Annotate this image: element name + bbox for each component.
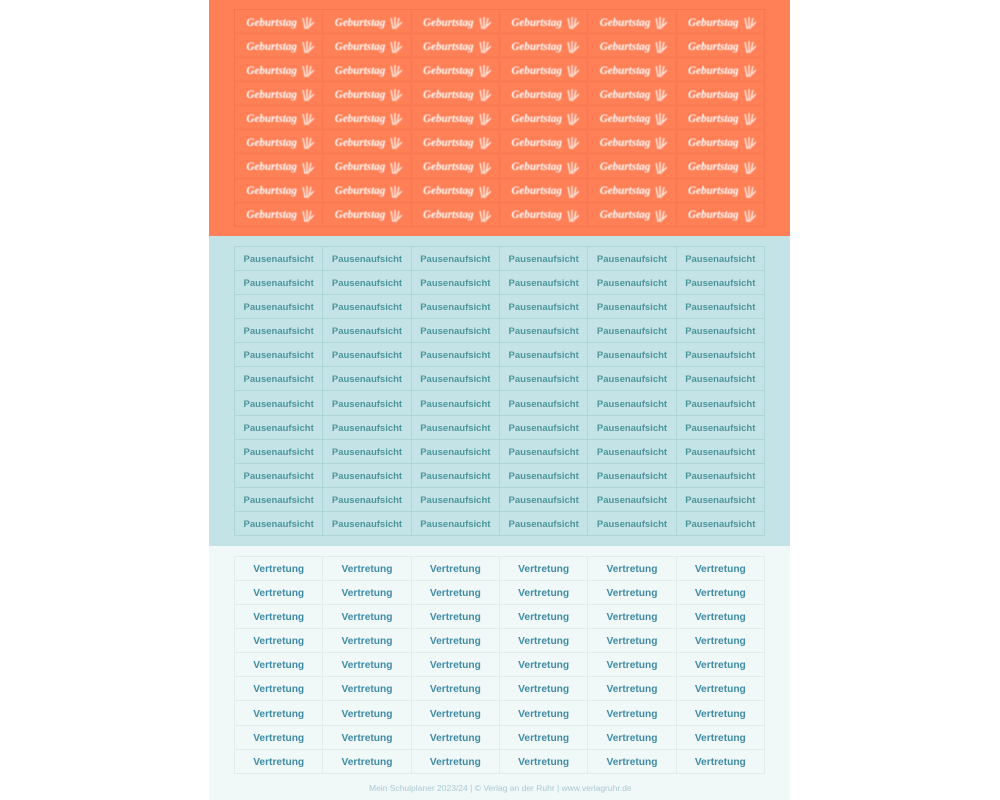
- sticker grid: Geburtstag: Geburtstag: [246, 185, 297, 197]
- sticker grid: Vertretung: Vertretung: [430, 757, 481, 768]
- sticker grid: Pausenaufsicht: Pausenaufsicht: [244, 350, 314, 361]
- sticker grid: Pausenaufsicht: Pausenaufsicht: [509, 302, 579, 313]
- sticker grid: Pausenaufsicht: Pausenaufsicht: [332, 278, 402, 289]
- sticker grid: Pausenaufsicht: Pausenaufsicht: [597, 278, 667, 289]
- sticker grid: Pausenaufsicht: Pausenaufsicht: [420, 423, 490, 434]
- sticker grid: Geburtstag: Geburtstag: [335, 17, 385, 29]
- sticker grid: Geburtstag: Geburtstag: [423, 161, 474, 173]
- sticker grid: Pausenaufsicht: Pausenaufsicht: [420, 471, 490, 482]
- sticker grid: Geburtstag: Geburtstag: [423, 209, 474, 221]
- sticker grid: Vertretung: Vertretung: [430, 588, 481, 599]
- sticker grid: Pausenaufsicht: Pausenaufsicht: [244, 254, 314, 265]
- sticker grid: Vertretung: Vertretung: [430, 708, 481, 720]
- sticker grid: Pausenaufsicht: Pausenaufsicht: [685, 495, 755, 506]
- sticker grid: Pausenaufsicht: Pausenaufsicht: [244, 398, 314, 410]
- sticker grid: Pausenaufsicht: Pausenaufsicht: [597, 471, 667, 482]
- sticker grid: Geburtstag: Geburtstag: [600, 41, 650, 53]
- sticker grid: Vertretung: Vertretung: [430, 684, 481, 695]
- sticker grid: Pausenaufsicht: Pausenaufsicht: [685, 254, 755, 265]
- sticker grid: Pausenaufsicht: Pausenaufsicht: [244, 471, 314, 482]
- sticker grid: Vertretung: Vertretung: [695, 588, 746, 599]
- sticker grid: Vertretung: Vertretung: [253, 612, 304, 623]
- sticker grid: Pausenaufsicht: Pausenaufsicht: [685, 302, 755, 313]
- sticker grid: Vertretung: Vertretung: [518, 757, 569, 768]
- sticker grid: Vertretung: Vertretung: [606, 733, 657, 744]
- sticker grid: Pausenaufsicht: Pausenaufsicht: [420, 254, 490, 265]
- sticker grid: Vertretung: Vertretung: [606, 684, 657, 695]
- sticker grid: Geburtstag: Geburtstag: [246, 41, 297, 53]
- sticker grid: Vertretung: Vertretung: [342, 636, 392, 647]
- sticker grid: Vertretung: Vertretung: [606, 757, 657, 768]
- sticker grid: Vertretung: Vertretung: [695, 636, 746, 647]
- sticker grid: Geburtstag: Geburtstag: [511, 185, 562, 197]
- sticker grid: Pausenaufsicht: Pausenaufsicht: [509, 350, 579, 361]
- sticker grid: Vertretung: Vertretung: [606, 588, 657, 599]
- panel: pale background: [209, 546, 790, 800]
- sticker grid: Vertretung: Vertretung: [518, 733, 569, 744]
- sticker grid: Geburtstag: Geburtstag: [335, 161, 385, 173]
- sticker grid: Pausenaufsicht: Pausenaufsicht: [420, 374, 490, 385]
- sticker grid: Geburtstag: Geburtstag: [688, 161, 739, 173]
- sticker grid: Geburtstag: Geburtstag: [600, 161, 650, 173]
- sticker grid: Vertretung: Vertretung: [253, 564, 304, 575]
- sticker grid: Vertretung: Vertretung: [253, 708, 304, 720]
- sticker grid: Vertretung: Vertretung: [342, 660, 392, 671]
- sticker grid: Vertretung: [234, 556, 765, 774]
- sticker grid: Pausenaufsicht: [234, 246, 765, 536]
- sticker grid: Pausenaufsicht: Pausenaufsicht: [244, 423, 314, 434]
- sticker grid: Pausenaufsicht: Pausenaufsicht: [509, 326, 579, 337]
- sticker grid: Pausenaufsicht: Pausenaufsicht: [597, 326, 667, 337]
- sticker grid: Geburtstag: Geburtstag: [600, 209, 650, 221]
- sticker grid: Pausenaufsicht: Pausenaufsicht: [597, 495, 667, 506]
- sticker grid: Vertretung: Vertretung: [342, 612, 392, 623]
- sticker grid: Vertretung: Vertretung: [342, 708, 392, 720]
- sticker grid: Pausenaufsicht: Pausenaufsicht: [597, 423, 667, 434]
- sticker grid: Geburtstag: Geburtstag: [246, 161, 297, 173]
- sticker grid: Pausenaufsicht: Pausenaufsicht: [332, 495, 402, 506]
- sticker grid: Pausenaufsicht: Pausenaufsicht: [244, 519, 314, 530]
- sticker grid: Pausenaufsicht: Pausenaufsicht: [420, 350, 490, 361]
- sticker grid: Vertretung: Vertretung: [253, 733, 304, 744]
- sticker grid: Pausenaufsicht: Pausenaufsicht: [509, 374, 579, 385]
- sticker grid: Pausenaufsicht: Pausenaufsicht: [244, 374, 314, 385]
- sticker grid: Vertretung: Vertretung: [430, 636, 481, 647]
- sticker grid: Vertretung: Vertretung: [606, 660, 657, 671]
- sticker grid: Vertretung: Vertretung: [518, 708, 569, 720]
- sticker grid: Vertretung: Vertretung: [518, 612, 569, 623]
- sticker grid: Geburtstag: Geburtstag: [688, 209, 739, 221]
- sticker grid: Pausenaufsicht: Pausenaufsicht: [332, 302, 402, 313]
- sticker grid: Pausenaufsicht: Pausenaufsicht: [244, 326, 314, 337]
- sticker grid: Pausenaufsicht: Pausenaufsicht: [332, 254, 402, 265]
- sticker grid: Vertretung: Vertretung: [695, 757, 746, 768]
- sticker grid: Pausenaufsicht: Pausenaufsicht: [332, 326, 402, 337]
- sticker grid: Geburtstag: Geburtstag: [423, 65, 474, 77]
- sticker grid: Pausenaufsicht: Pausenaufsicht: [685, 471, 755, 482]
- sticker grid: Pausenaufsicht: Pausenaufsicht: [685, 374, 755, 385]
- sticker grid: Pausenaufsicht: Pausenaufsicht: [685, 398, 755, 410]
- sticker grid: Vertretung: Vertretung: [342, 588, 392, 599]
- sticker grid: Vertretung: Vertretung: [342, 733, 392, 744]
- sticker grid: Vertretung: Vertretung: [342, 757, 392, 768]
- sticker grid: Geburtstag: Geburtstag: [688, 113, 739, 125]
- sticker grid: Geburtstag: Geburtstag: [511, 113, 562, 125]
- sticker grid: Geburtstag: Geburtstag: [246, 17, 297, 29]
- sticker grid: Geburtstag: Geburtstag: [335, 89, 385, 101]
- sticker grid: Geburtstag: Geburtstag: [423, 185, 474, 197]
- sticker grid: Vertretung: Vertretung: [518, 588, 569, 599]
- sticker grid: Pausenaufsicht: Pausenaufsicht: [332, 447, 402, 458]
- sticker grid: Geburtstag: Geburtstag: [600, 137, 650, 149]
- sticker grid: Pausenaufsicht: Pausenaufsicht: [420, 278, 490, 289]
- sticker grid: Pausenaufsicht: Pausenaufsicht: [685, 278, 755, 289]
- sticker grid: Geburtstag: Geburtstag: [688, 65, 739, 77]
- sticker grid: Geburtstag: Geburtstag: [600, 185, 650, 197]
- sticker grid: Pausenaufsicht: Pausenaufsicht: [332, 423, 402, 434]
- sticker grid: Geburtstag: Geburtstag: [688, 137, 739, 149]
- sticker grid: Vertretung: Vertretung: [606, 612, 657, 623]
- sticker grid: Pausenaufsicht: Pausenaufsicht: [332, 374, 402, 385]
- sticker grid: Vertretung: Vertretung: [342, 564, 392, 575]
- sticker grid: Geburtstag: Geburtstag: [246, 209, 297, 221]
- sticker grid: Geburtstag: Geburtstag: [335, 185, 385, 197]
- sticker grid: Pausenaufsicht: Pausenaufsicht: [332, 350, 402, 361]
- sticker grid: Vertretung: Vertretung: [518, 564, 569, 575]
- sticker grid: Pausenaufsicht: Pausenaufsicht: [420, 447, 490, 458]
- sticker grid: Geburtstag: Geburtstag: [423, 41, 474, 53]
- sticker grid: Pausenaufsicht: Pausenaufsicht: [244, 278, 314, 289]
- sticker grid: Geburtstag: Geburtstag: [688, 89, 739, 101]
- sticker grid: Pausenaufsicht: Pausenaufsicht: [244, 447, 314, 458]
- sticker grid: Pausenaufsicht: Pausenaufsicht: [509, 423, 579, 434]
- sticker grid: Pausenaufsicht: Pausenaufsicht: [685, 519, 755, 530]
- sticker grid: Vertretung: Vertretung: [253, 588, 304, 599]
- sticker grid: Vertretung: Vertretung: [518, 660, 569, 671]
- sticker grid: Geburtstag: Geburtstag: [600, 113, 650, 125]
- sticker grid: Pausenaufsicht: Pausenaufsicht: [597, 374, 667, 385]
- sticker grid: Pausenaufsicht: Pausenaufsicht: [420, 519, 490, 530]
- panel: orange background: [209, 0, 790, 236]
- sticker grid: Geburtstag: Geburtstag: [600, 89, 650, 101]
- sticker grid: Geburtstag: Geburtstag: [600, 65, 650, 77]
- sticker grid: Pausenaufsicht: Pausenaufsicht: [244, 302, 314, 313]
- sticker grid: Pausenaufsicht: Pausenaufsicht: [420, 326, 490, 337]
- sticker grid: Pausenaufsicht: Pausenaufsicht: [597, 398, 667, 410]
- sticker grid: Vertretung: Vertretung: [430, 564, 481, 575]
- sticker grid: Geburtstag: Geburtstag: [423, 113, 474, 125]
- sticker grid: Vertretung: Vertretung: [342, 684, 392, 695]
- sticker grid: Pausenaufsicht: Pausenaufsicht: [509, 471, 579, 482]
- sticker grid: Vertretung: Vertretung: [695, 564, 746, 575]
- sticker grid: Geburtstag: Geburtstag: [335, 41, 385, 53]
- sticker grid: Geburtstag: Geburtstag: [423, 137, 474, 149]
- sticker grid: Geburtstag: Geburtstag: [688, 41, 739, 53]
- sticker grid: Geburtstag: Geburtstag: [246, 113, 297, 125]
- sticker grid: Geburtstag: Geburtstag: [335, 209, 385, 221]
- sticker grid: Vertretung: Vertretung: [253, 636, 304, 647]
- sticker grid: Vertretung: Vertretung: [253, 757, 304, 768]
- sticker grid: Vertretung: Vertretung: [606, 708, 657, 720]
- sticker grid: Pausenaufsicht: Pausenaufsicht: [685, 350, 755, 361]
- sticker grid: Pausenaufsicht: Pausenaufsicht: [332, 519, 402, 530]
- sticker grid: Geburtstag: Geburtstag: [511, 209, 562, 221]
- footer text: Mein Schulplaner 2023/24 | © Verlag an der Ruhr | www.verlagruhr.de: [369, 783, 632, 793]
- sticker grid: Vertretung: Vertretung: [695, 684, 746, 695]
- sticker grid: Pausenaufsicht: Pausenaufsicht: [332, 471, 402, 482]
- sticker grid: Vertretung: Vertretung: [606, 564, 657, 575]
- sticker grid: Geburtstag: Geburtstag: [511, 41, 562, 53]
- sticker grid: Pausenaufsicht: Pausenaufsicht: [509, 447, 579, 458]
- sticker grid: Pausenaufsicht: Pausenaufsicht: [420, 495, 490, 506]
- sticker grid: Vertretung: Vertretung: [430, 612, 481, 623]
- sticker grid: Pausenaufsicht: Pausenaufsicht: [597, 350, 667, 361]
- sticker grid: Pausenaufsicht: Pausenaufsicht: [597, 519, 667, 530]
- sticker grid: Geburtstag: Geburtstag: [511, 161, 562, 173]
- sticker grid: Pausenaufsicht: Pausenaufsicht: [509, 278, 579, 289]
- sticker grid: Pausenaufsicht: Pausenaufsicht: [420, 302, 490, 313]
- panel: light blue background: [209, 236, 790, 546]
- sticker grid: Vertretung: Vertretung: [695, 733, 746, 744]
- sticker grid: Pausenaufsicht: Pausenaufsicht: [509, 398, 579, 410]
- sticker grid: Vertretung: Vertretung: [695, 708, 746, 720]
- sticker grid: Geburtstag: Geburtstag: [423, 17, 474, 29]
- sticker grid: Vertretung: Vertretung: [695, 660, 746, 671]
- sticker grid: Pausenaufsicht: Pausenaufsicht: [685, 423, 755, 434]
- sticker grid: Geburtstag: Geburtstag: [335, 113, 385, 125]
- sticker grid: Pausenaufsicht: Pausenaufsicht: [509, 495, 579, 506]
- sticker grid: Geburtstag: [234, 9, 765, 227]
- sticker grid: Geburtstag: Geburtstag: [423, 89, 474, 101]
- sticker grid: Geburtstag: Geburtstag: [511, 89, 562, 101]
- sticker grid: Vertretung: Vertretung: [606, 636, 657, 647]
- sticker grid: Geburtstag: Geburtstag: [335, 65, 385, 77]
- sticker grid: Pausenaufsicht: Pausenaufsicht: [509, 254, 579, 265]
- sticker grid: Pausenaufsicht: Pausenaufsicht: [244, 495, 314, 506]
- sticker grid: Pausenaufsicht: Pausenaufsicht: [597, 254, 667, 265]
- sticker grid: Geburtstag: Geburtstag: [511, 17, 562, 29]
- sticker grid: Vertretung: Vertretung: [518, 636, 569, 647]
- sticker grid: Geburtstag: Geburtstag: [246, 137, 297, 149]
- sticker grid: Pausenaufsicht: Pausenaufsicht: [420, 398, 490, 410]
- sticker grid: Vertretung: Vertretung: [430, 733, 481, 744]
- sticker grid: Pausenaufsicht: Pausenaufsicht: [685, 447, 755, 458]
- sticker grid: Geburtstag: Geburtstag: [688, 17, 739, 29]
- sticker grid: Pausenaufsicht: Pausenaufsicht: [597, 447, 667, 458]
- sticker grid: Vertretung: Vertretung: [253, 684, 304, 695]
- sticker grid: Geburtstag: Geburtstag: [600, 17, 650, 29]
- sticker grid: Vertretung: Vertretung: [518, 684, 569, 695]
- sticker grid: Geburtstag: Geburtstag: [688, 185, 739, 197]
- sticker grid: Pausenaufsicht: Pausenaufsicht: [685, 326, 755, 337]
- sticker grid: Vertretung: Vertretung: [430, 660, 481, 671]
- sticker grid: Vertretung: Vertretung: [253, 660, 304, 671]
- sticker grid: Pausenaufsicht: Pausenaufsicht: [597, 302, 667, 313]
- sticker grid: Pausenaufsicht: Pausenaufsicht: [509, 519, 579, 530]
- sticker grid: Geburtstag: Geburtstag: [511, 65, 562, 77]
- sticker grid: Pausenaufsicht: Pausenaufsicht: [332, 398, 402, 410]
- sticker grid: Geburtstag: Geburtstag: [511, 137, 562, 149]
- sticker grid: Geburtstag: Geburtstag: [335, 137, 385, 149]
- sticker grid: Geburtstag: Geburtstag: [246, 65, 297, 77]
- sticker grid: Vertretung: Vertretung: [695, 612, 746, 623]
- sticker grid: Geburtstag: Geburtstag: [246, 89, 297, 101]
